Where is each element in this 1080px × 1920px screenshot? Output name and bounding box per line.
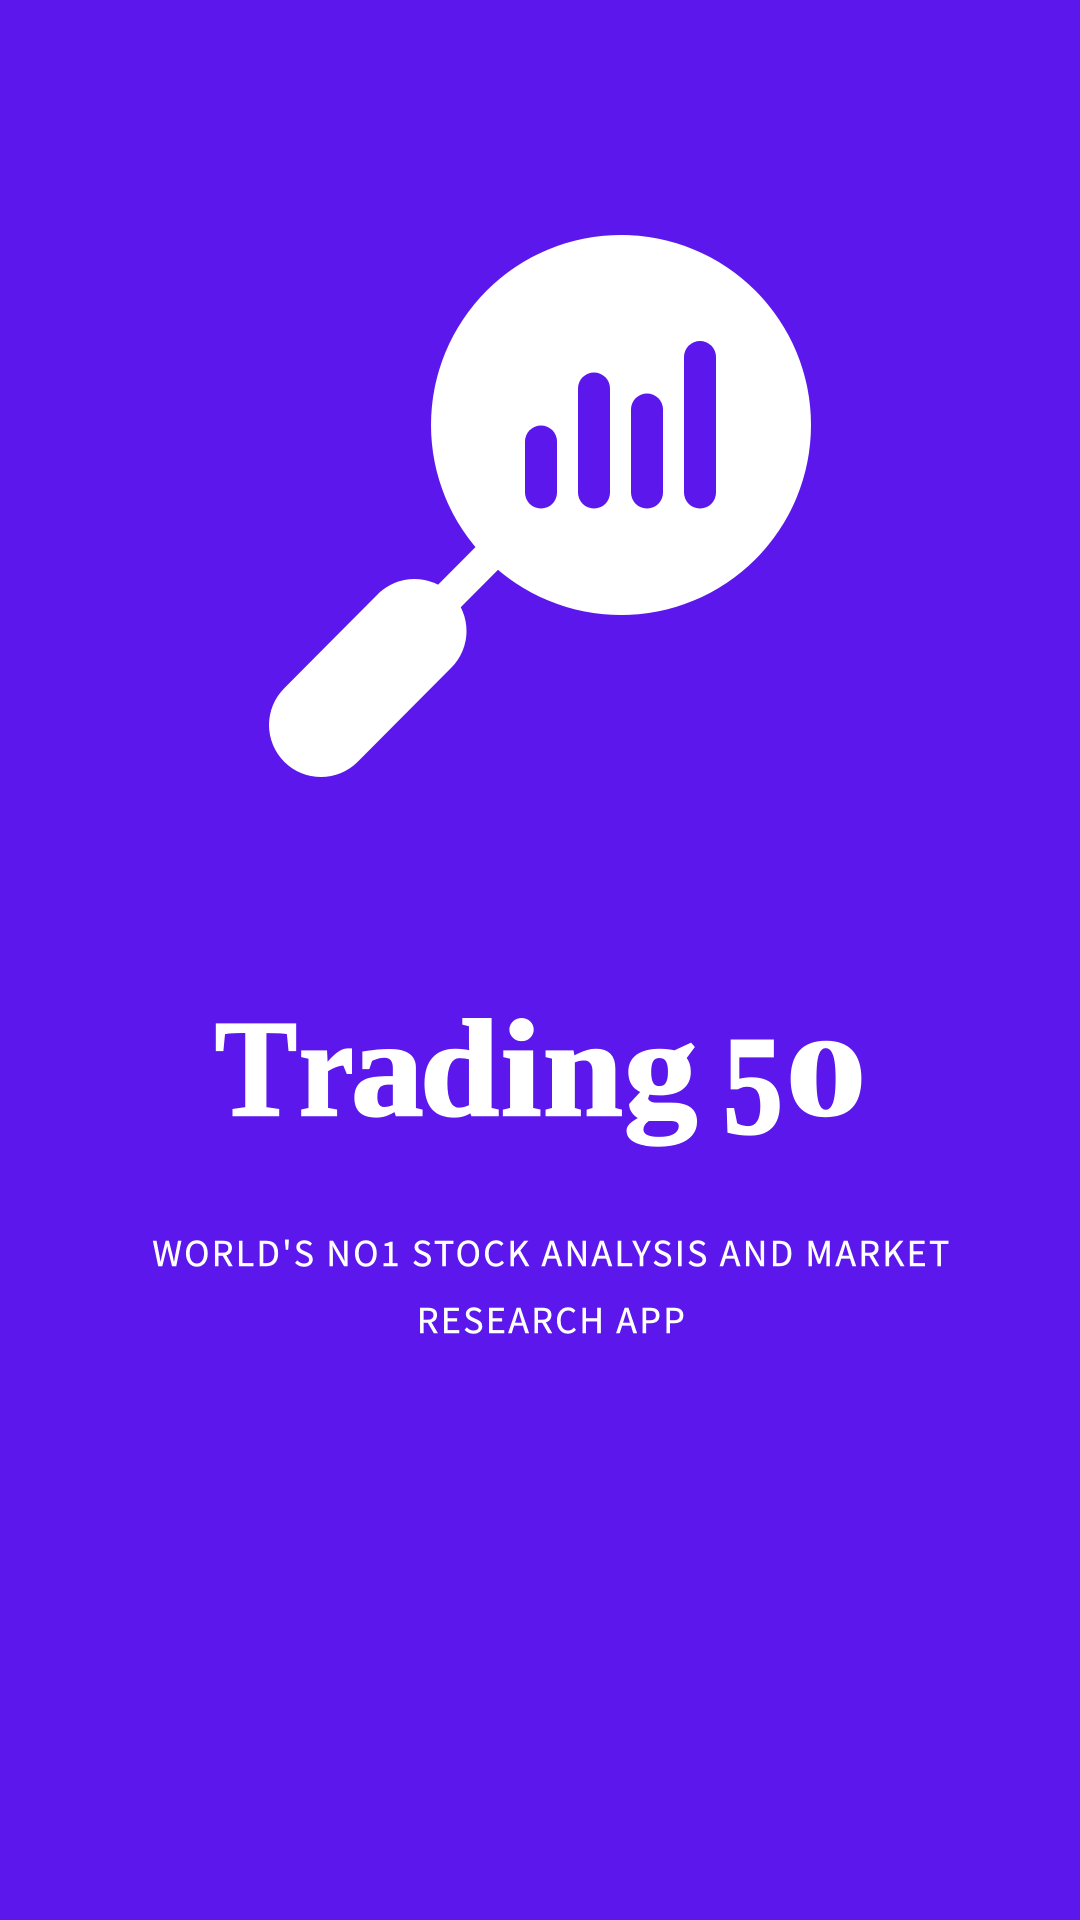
subtitle	[152, 1227, 952, 1343]
subtitle: RESEARCH APP	[417, 1294, 687, 1343]
title	[215, 992, 866, 1164]
magnifier lens	[431, 235, 811, 615]
title: 5	[723, 1008, 783, 1164]
subtitle: WORLD'S NO1 STOCK ANALYSIS AND MARKET	[152, 1227, 952, 1276]
magnifier neck	[414, 525, 520, 631]
title: T	[215, 992, 297, 1145]
title: g	[624, 992, 697, 1145]
title: n	[543, 992, 623, 1145]
title: 0	[786, 1017, 866, 1139]
magnifier handle	[321, 631, 414, 725]
bar chart inside lens	[525, 341, 716, 508]
title: r	[299, 992, 354, 1145]
title: i	[501, 992, 541, 1145]
title: d	[420, 992, 499, 1145]
title: a	[351, 992, 423, 1145]
